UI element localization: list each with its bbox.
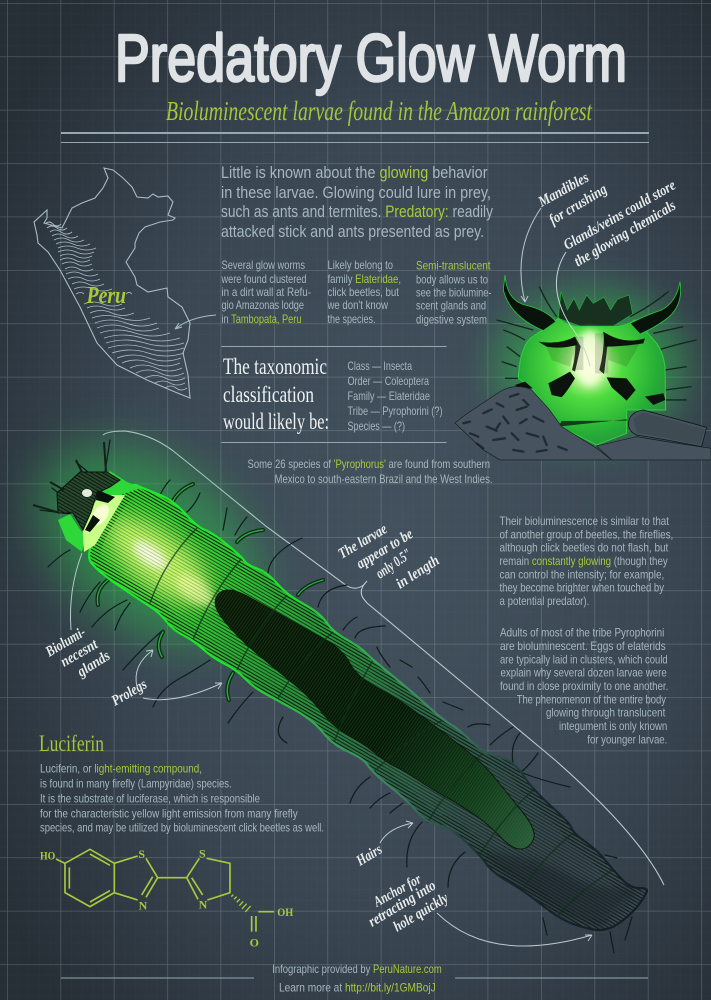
arrow: mandibles: [521, 208, 541, 302]
head dark capsule: [57, 472, 120, 530]
right mandible: [630, 282, 681, 334]
larva prolegs: [97, 484, 323, 700]
Luciferin text: [40, 761, 324, 835]
finger hatching: [633, 413, 705, 445]
arrow: anchor: [437, 913, 592, 946]
Luciferin text: It is the substrate of luciferase, which is responsible: [40, 791, 260, 805]
paragraph: adults: for younger larvae.: [587, 732, 667, 746]
head callout: mandibles: Mandibles: [535, 170, 592, 211]
paragraph: bioluminescence: remain constantly glowing (though they: [500, 554, 668, 568]
map of Peru: [34, 168, 216, 398]
Pyrophorus note: [248, 457, 492, 486]
head dark marks: [85, 490, 115, 532]
intro text: attacked stick and ants presented as prey.: [221, 222, 484, 241]
paragraph: bioluminescence: [500, 514, 673, 608]
larva segment lines: [150, 528, 613, 917]
molecule atoms: HO: [40, 848, 55, 862]
larva head: [33, 442, 142, 552]
molecule atoms: N: [199, 898, 208, 912]
column: family: click beetles, but: [328, 285, 400, 299]
column: semi-translucent: digestive system: [416, 312, 487, 326]
column: glow worms location: in Tambopata, Peru: [222, 312, 302, 326]
column: family: family Elateridae,: [328, 272, 401, 286]
head dark markings: [515, 332, 665, 427]
luciferin molecule: [40, 846, 294, 949]
taxonomy list: [348, 359, 442, 433]
column: glow worms location: [221, 258, 311, 326]
intro text: [221, 163, 493, 241]
callout: bioluminescent glands: [42, 553, 113, 681]
tail shading: [480, 850, 640, 928]
map relief hatching: [45, 222, 187, 390]
taxonomy heading: The taxonomic: [223, 354, 327, 379]
column: glow worms location: gio Amazonas lodge: [222, 298, 304, 312]
callout: larva length: in length: [393, 553, 442, 592]
larva brightest spots: [129, 536, 171, 574]
head spines: [497, 287, 697, 400]
callout: anchor: retracting into: [366, 878, 439, 930]
column: semi-translucent: scent glands and: [416, 298, 486, 312]
molecule atoms: S: [199, 846, 206, 860]
larva gut: [215, 590, 534, 849]
ground ledge: [597, 437, 711, 460]
paragraph: adults: The phenomenon of the entire body: [517, 692, 666, 706]
column: family: [327, 258, 401, 326]
column: family: the species.: [328, 312, 376, 326]
rock: [455, 387, 612, 460]
footer credits: Learn more at http://bit.ly/1GMBojJ: [279, 981, 436, 995]
paragraph: adults: are typically laid in clusters, which could: [500, 652, 668, 666]
paragraph: bioluminescence: Their bioluminescence is similar to that: [500, 514, 670, 528]
arrows: prolegs: [136, 650, 222, 700]
callout: larva length: [336, 521, 442, 592]
taxonomy rules: [222, 346, 446, 443]
callout: prolegs: [109, 650, 222, 709]
taxonomy list: Family — Elateridae: [348, 389, 430, 403]
paragraph: bioluminescence: they become brighter when touched by: [500, 581, 664, 595]
larva bright glow: [93, 501, 223, 619]
footer rules: [61, 978, 648, 979]
paragraph: bioluminescence: of another group of beetles, the fireflies,: [500, 527, 673, 541]
Luciferin text: species, and may be utilized by bioluminescent click beetles as well.: [40, 821, 324, 835]
larva outer glow: [2, 406, 298, 684]
callout: larva length: The larvae: [336, 521, 390, 562]
Luciferin text: Luciferin, or light-emitting compound,: [40, 761, 202, 775]
paragraph: adults: glowing through translucent: [546, 706, 666, 720]
larva body: [89, 485, 647, 930]
Luciferin heading: Luciferin: [39, 731, 104, 756]
hatching over glow: [90, 489, 360, 720]
larva illustration: [16, 423, 648, 954]
column: semi-translucent: [416, 258, 492, 326]
paragraph: bioluminescence: can control the intensity; for example,: [500, 567, 664, 581]
length bracket: [103, 431, 664, 885]
callout: bioluminescent glands: Biolumi-: [42, 624, 89, 661]
callout: hairs: [353, 821, 413, 870]
taxonomy list: Species — (?): [348, 419, 405, 433]
column: family: Likely belong to: [328, 258, 393, 272]
paragraph: bioluminescence: although click beetles do not flash, but: [500, 541, 669, 555]
column: glow worms location: Several glow worms: [222, 258, 305, 272]
callout: bioluminescent glands: glands: [74, 648, 113, 681]
gut hatching: [215, 590, 534, 849]
footer credits: [272, 962, 442, 995]
molecule atoms: [40, 846, 294, 949]
map outline: [34, 168, 190, 398]
head callout: glands: [556, 177, 679, 366]
callout: bioluminescent glands: necesnt: [58, 636, 101, 670]
head illustration: [455, 275, 711, 460]
callout: prolegs: Prolegs: [109, 677, 150, 709]
column: family: we don't know: [327, 298, 388, 312]
head white spot: [82, 489, 92, 497]
callout: hairs: Hairs: [353, 842, 385, 870]
callout: anchor: [366, 871, 592, 946]
arrow: glands: [556, 252, 590, 366]
paragraph: adults: Adults of most of the tribe Pyrophorini: [500, 626, 664, 640]
arrow to Tambopata: [175, 315, 216, 329]
footer credits: Infographic provided by PeruNature.com: [272, 962, 442, 976]
callout: larva length: appear to be: [354, 526, 416, 572]
left mandible: [503, 275, 556, 331]
head capsule: [518, 318, 666, 445]
rock marks: [463, 394, 567, 452]
map label Peru: Peru: [86, 283, 126, 309]
molecule atoms: OH: [277, 905, 294, 919]
arrow: hairs: [380, 821, 413, 843]
column: glow worms location: in a dirt wall at Refu-: [222, 285, 311, 299]
header rules: [61, 132, 649, 143]
paragraph: adults: are bioluminescent. Eggs of elaterids: [500, 639, 666, 653]
callout: anchor: Anchor for: [371, 871, 424, 911]
head spikes: [33, 442, 106, 512]
head callout: glands: the glowing chemicals: [572, 198, 679, 270]
head callout: mandibles: for crushing: [547, 181, 610, 228]
callout: larva length: only 0.5": [373, 546, 415, 582]
column: semi-translucent: Semi-translucent: [416, 258, 491, 272]
head centre glow: [575, 330, 605, 387]
larva hatching and shading: [90, 488, 646, 929]
larva outline: [89, 485, 647, 930]
Luciferin text: for the characteristic yellow light emission from many firefly: [40, 806, 298, 820]
molecule bonds: [56, 849, 274, 932]
paragraph: adults: found in close proximity to one another.: [500, 679, 668, 693]
head hatching: [57, 472, 120, 530]
head callout: mandibles: [521, 170, 610, 302]
head green lobes: [58, 514, 85, 552]
Luciferin text: is found in many firefly (Lampyridae) species.: [40, 776, 232, 790]
intro text: such as ants and termites. Predatory: readily: [221, 202, 493, 221]
paragraph: adults: [500, 626, 668, 746]
taxonomy heading: would likely be:: [223, 409, 329, 434]
paragraph: adults: integument is only known: [559, 719, 667, 733]
finger: [628, 410, 707, 447]
taxonomy heading: classification: [223, 382, 314, 407]
callout: anchor: hole quickly: [391, 890, 452, 935]
head crown: [558, 292, 633, 326]
taxonomy heading: [223, 354, 329, 434]
arrow: glands line: [70, 553, 82, 630]
molecule hashed wedge: [231, 895, 251, 912]
intro text: in these larvae. Glowing could lure in prey,: [221, 183, 491, 202]
paragraph: adults: explain why several dozen larvae were: [500, 666, 667, 680]
paragraph: bioluminescence: a potential predator).: [500, 594, 589, 608]
column: semi-translucent: body allows us to: [416, 272, 488, 286]
taxonomy list: Tribe — Pyrophorini (?): [348, 404, 442, 418]
neck hatching: [547, 333, 640, 373]
intro text: Little is known about the glowing behavior: [221, 163, 488, 182]
taxonomy list: Class — Insecta: [348, 359, 412, 373]
column: glow worms location: were found clustered: [221, 272, 306, 286]
molecule atoms: S: [138, 847, 145, 861]
larva rim shading: [89, 485, 647, 930]
larva hairs: [40, 440, 632, 953]
taxonomy list: Order — Coleoptera: [348, 374, 429, 388]
head glow: [493, 290, 687, 443]
Pyrophorus note: Some 26 species of 'Pyrophorus' are found from southern: [248, 457, 490, 471]
head callout: glands: Glands/veins could store: [561, 177, 679, 253]
column: semi-translucent: see the biolumine-: [416, 286, 492, 300]
Pyrophorus note: Mexico to south-eastern Brazil and the West Indies.: [274, 472, 492, 486]
molecule atoms: O: [250, 935, 259, 949]
molecule atoms: N: [139, 898, 148, 912]
